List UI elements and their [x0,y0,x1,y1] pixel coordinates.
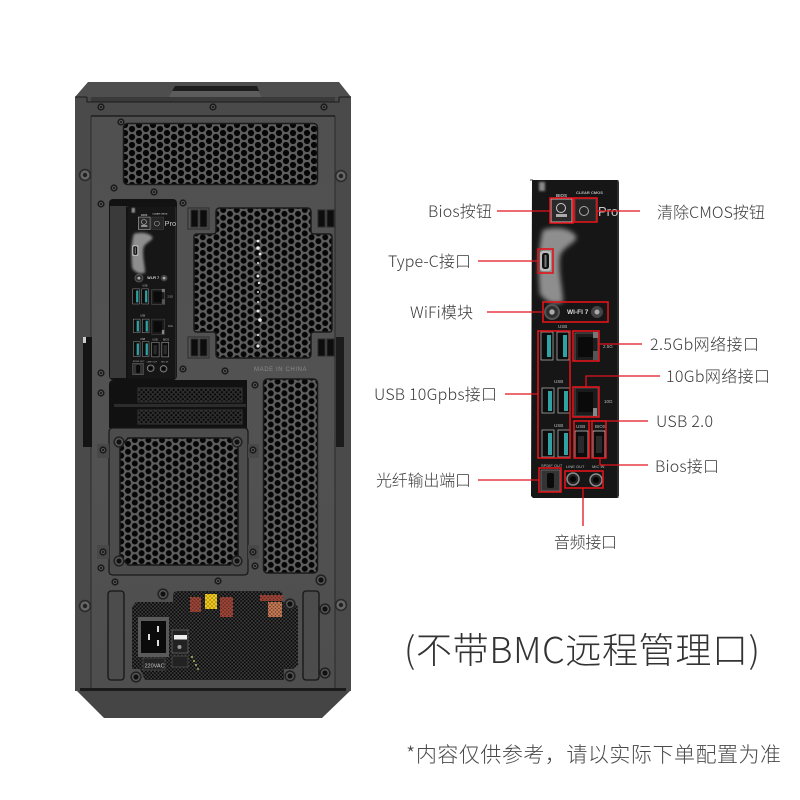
label: Type-C port: Type-C接口 [388,248,471,272]
top vent grille [124,124,318,184]
grille highlights [256,240,262,348]
LED dots [191,656,199,670]
voltage label: 220VAC [144,664,165,670]
PSU tabs [108,591,319,680]
I/O opening [109,199,177,380]
Type-C port [540,251,551,271]
voltage label [143,658,165,670]
Pro mark: Pro [598,204,618,219]
case screws [79,103,347,683]
RJ45 ports [575,332,613,416]
clear CMOS button: CLEAR CMOS [576,190,603,195]
enlarged I/O plate [530,180,619,498]
power socket [138,617,169,657]
BIOS button: BIOS [556,193,567,198]
power supply [132,591,298,680]
vent tabs [188,208,334,358]
optical output port: SPDIF OUT [541,463,563,468]
label: 10Gb network port: 10Gb网络接口 [666,363,770,387]
side slot left [83,337,92,447]
side slot right [336,337,344,447]
BIOS button [551,193,572,222]
USB 2.0 and BIOS ports: BIOS [595,424,606,429]
USB ports teal [541,324,570,457]
audio jacks [566,464,605,486]
audio jacks: LINE OUT [566,464,585,469]
PCI expansion slots [109,380,247,428]
label: 2.5Gb network port: 2.5Gb网络接口 [650,331,759,355]
label: USB 10Gbps port: USB 10Gpbs接口 [374,381,497,405]
computer case rear view [75,82,351,718]
label: audio port: 音频接口 [554,529,617,553]
side vent grille [264,379,318,573]
label: clear CMOS button: 清除CMOS按钮 [657,199,765,223]
USB ports teal: USB [558,324,567,329]
optical output port [541,463,563,491]
RJ45 ports: 10G [604,399,613,404]
case bottom cap [77,691,350,718]
power switch [172,630,188,667]
PSU colored reflections [190,594,283,617]
lower fan mount [97,428,259,575]
red callout boxes [538,198,608,492]
RJ45 ports: 2.5G [603,344,613,349]
USB ports teal: USB [554,379,563,384]
audio jacks: MIC IN [592,464,605,469]
label: WiFi module: WiFi模块 [410,299,473,323]
label: Bios port: Bios接口 [655,453,719,477]
label: Bios button: Bios按钮 [428,198,492,222]
WiFi antennas [544,304,603,320]
label: USB 2.0: USB 2.0 [656,408,713,432]
case body [75,97,351,691]
WiFi antennas: WI-FI 7 [567,309,589,316]
USB ports teal: USB [554,423,563,428]
USB 2.0 and BIOS ports: USB [576,424,585,429]
disclaimer: *内容仅供参考，请以实际下单配置为准 [406,739,781,769]
USB 2.0 and BIOS ports [575,424,606,458]
clear CMOS button [575,190,603,222]
plate background [530,180,619,498]
case top cap [75,82,351,102]
leader lines [478,211,660,526]
note: no BMC port: (不带BMC远程管理口) [404,622,760,674]
label: optical output: 光纤输出端口 [376,467,471,491]
made in china mark: MADE IN CHINA [254,367,307,373]
small I/O plate in case [127,207,176,379]
main fan grille [194,208,332,358]
